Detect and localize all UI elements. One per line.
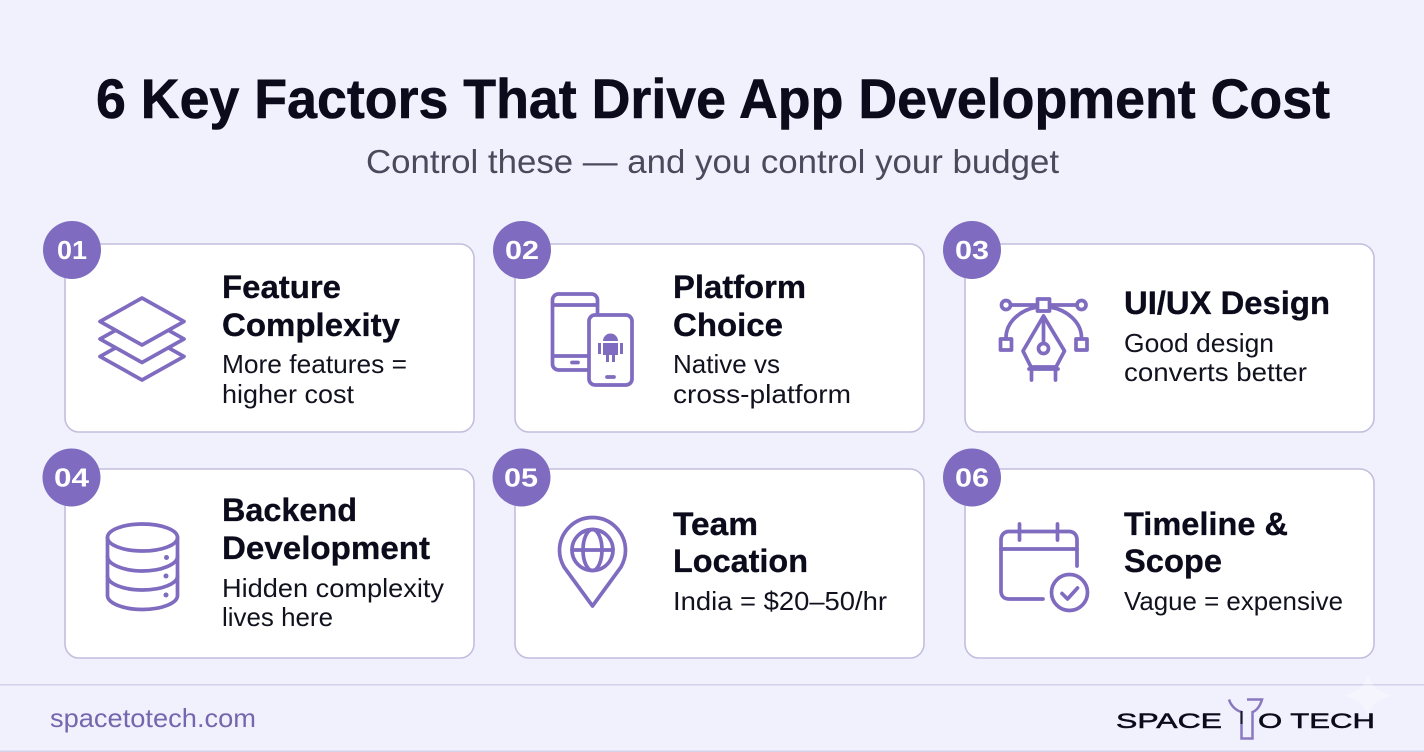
badge 05: 05 xyxy=(504,462,538,492)
badge 02 xyxy=(493,221,551,279)
panel: team location xyxy=(492,448,924,658)
icon: phones with android xyxy=(552,294,632,385)
badge 05 xyxy=(492,448,550,506)
title: 6 Key Factors That Drive App Development Cost xyxy=(96,67,1330,130)
panel: timeline and scope xyxy=(943,448,1374,658)
badge 03: 03 xyxy=(955,235,989,265)
footer logo: O TECH xyxy=(1258,710,1375,733)
heading: UI/UX Design xyxy=(1124,285,1330,321)
heading xyxy=(673,269,806,343)
heading: Feature xyxy=(222,269,341,305)
heading: Team xyxy=(673,506,758,542)
description: More features = xyxy=(222,349,407,379)
icon: layers xyxy=(100,298,184,380)
heading xyxy=(222,269,400,343)
heading: Backend xyxy=(222,492,357,528)
description xyxy=(673,349,851,409)
panel: feature complexity xyxy=(43,221,474,432)
heading: Platform xyxy=(673,269,806,305)
panel: platform choice xyxy=(493,221,924,432)
description: Vague = expensive xyxy=(1124,586,1343,616)
description xyxy=(222,349,407,409)
heading xyxy=(222,492,430,566)
badge 03 xyxy=(943,221,1001,279)
icon: calendar check xyxy=(1001,524,1088,610)
sparkle xyxy=(1344,674,1392,717)
description: Good design xyxy=(1124,328,1274,358)
badge 01: 01 xyxy=(57,235,87,265)
badge 04 xyxy=(42,448,100,506)
heading xyxy=(1124,506,1288,579)
footer logo xyxy=(1116,700,1375,738)
badge 04: 04 xyxy=(54,462,90,492)
description: lives here xyxy=(222,602,333,632)
heading: Location xyxy=(673,543,808,579)
heading: Complexity xyxy=(222,307,400,343)
icon: globe pin xyxy=(560,518,626,606)
footer logo: SPACE xyxy=(1116,710,1222,733)
panel: backend development xyxy=(42,448,474,658)
panel: ui/ux design xyxy=(943,221,1374,432)
description: India = $20–50/hr xyxy=(673,586,887,616)
description xyxy=(222,573,444,632)
description xyxy=(1124,328,1307,387)
badge 01 xyxy=(43,221,101,279)
heading: Timeline & xyxy=(1124,506,1288,542)
heading xyxy=(673,506,808,579)
icon: pen tool xyxy=(1000,299,1087,380)
badge 02: 02 xyxy=(505,235,539,265)
subtitle: Control these — and you control your budget xyxy=(366,143,1059,180)
footer website: spacetotech.com xyxy=(50,703,256,733)
description: converts better xyxy=(1124,357,1307,387)
description: cross-platform xyxy=(673,379,851,409)
icon: database xyxy=(108,524,178,610)
description: higher cost xyxy=(222,379,355,409)
description: Hidden complexity xyxy=(222,573,444,603)
heading: Scope xyxy=(1124,543,1222,579)
badge 06 xyxy=(943,448,1001,506)
badge 06: 06 xyxy=(955,462,989,492)
description: Native vs xyxy=(673,349,780,379)
heading: Development xyxy=(222,530,430,566)
heading: Choice xyxy=(673,307,783,343)
